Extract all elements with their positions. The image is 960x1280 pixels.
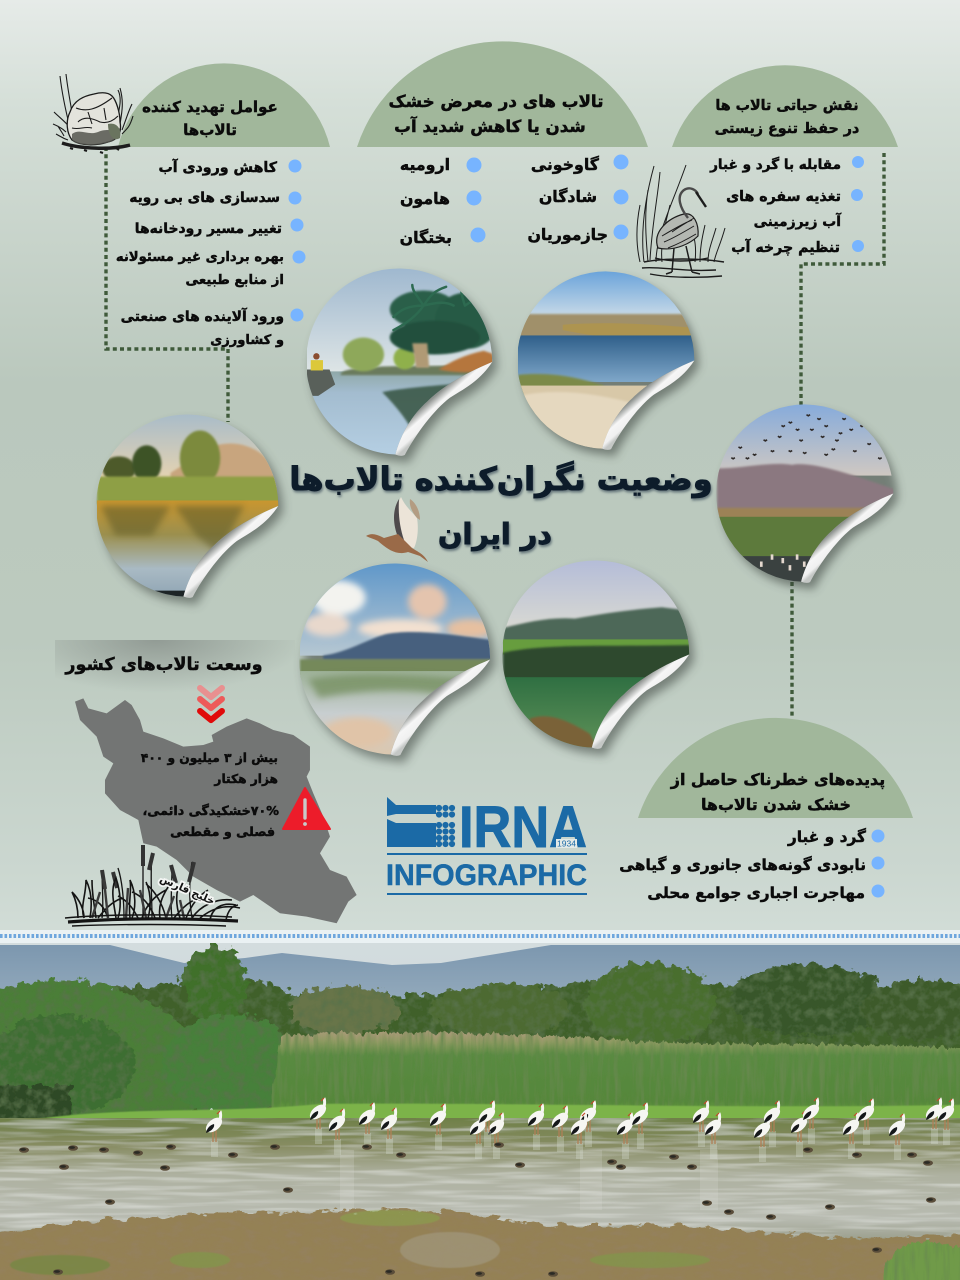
photo: wetland with storks	[0, 943, 960, 1280]
photo sticker: clouds and reflections	[300, 563, 495, 763]
list: threats: کاهش ورودی آب	[158, 158, 278, 176]
photo sticker: palms and boat	[307, 268, 499, 462]
list: vital roles: تنظیم چرخه آب	[731, 238, 840, 256]
list: wetland names: بختگان	[400, 228, 452, 247]
heading text: hazards	[670, 770, 885, 814]
logo: IRNA infographic: 1934	[557, 838, 576, 848]
text: area figure: بیش از ۳ میلیون و ۴۰۰	[141, 751, 278, 765]
list: wetland names: هامون	[400, 189, 450, 208]
list: vital roles	[709, 156, 864, 256]
map: Iran silhouette	[75, 698, 357, 923]
divider band	[0, 930, 960, 944]
map panel shading	[55, 640, 295, 725]
list: threats: بهره برداری غیر مسئولانه	[116, 250, 284, 265]
photo sticker: mountain and flock	[717, 404, 898, 589]
connector: hazards dotted line	[790, 582, 794, 718]
logo: IRNA infographic: IRNA	[459, 795, 587, 860]
heading dome: vital role	[672, 65, 898, 147]
logo: IRNA infographic	[386, 795, 587, 895]
label: Persian Gulf: خلیج فارس	[158, 873, 216, 908]
list: wetland names	[400, 154, 628, 247]
list: vital roles: مقابله با گرد و غبار	[709, 156, 841, 173]
list: vital roles: آب زیرزمینی	[754, 213, 842, 230]
panel: extent of wetlands	[64, 655, 357, 926]
connector: role dotted line	[801, 153, 884, 405]
list: threats: ورود آلاینده های صنعتی	[121, 308, 284, 325]
list: threats: سدسازی های بی رویه	[129, 190, 280, 206]
photo sticker: golden lake	[97, 414, 283, 604]
photo sticker: dry lake and reeds	[518, 271, 699, 456]
heading text: threats: تالاب‌ها	[183, 121, 237, 139]
heading dome: at risk	[357, 41, 648, 147]
title	[289, 460, 713, 551]
list: hazards	[619, 828, 884, 902]
icon: reeds sketch	[65, 845, 240, 926]
title: در ایران	[438, 517, 552, 551]
list: vital roles: تغذیه سفره های	[726, 189, 841, 205]
text: drying percentage: ۷۰%خشکیدگی دائمی،	[142, 803, 279, 818]
list: threats: از منابع طبیعی	[185, 273, 284, 288]
logo: IRNA infographic: INFOGRAPHIC	[386, 859, 587, 892]
heading text: threats	[142, 98, 278, 139]
icon: chevrons	[200, 688, 222, 720]
heading text: hazards: خشک شدن تالاب‌ها	[701, 795, 851, 814]
icon: rock with grass sketch	[53, 74, 133, 153]
list: wetland names: شادگان	[539, 187, 597, 206]
text: drying percentage: فصلی و مقطعی	[170, 824, 275, 839]
list: wetland names: جازموریان	[527, 225, 608, 244]
heading text: at risk	[389, 91, 603, 136]
list: hazards: مهاجرت اجباری جوامع محلی	[647, 884, 865, 902]
heading dome: hazards	[638, 718, 913, 818]
text: area figure	[141, 751, 278, 786]
heading text: vital role	[715, 98, 859, 137]
text: area figure: هزار هکتار	[213, 772, 278, 786]
list: wetland names: ارومیه	[400, 155, 450, 174]
panel: threats to wetlands	[53, 63, 330, 348]
heading text: vital role: در حفظ تنوع زیستی	[715, 121, 859, 137]
heading text: at risk: شدن یا کاهش شدید آب	[394, 115, 586, 136]
heading dome: threats	[118, 63, 330, 147]
connector: threats dotted line	[106, 147, 228, 422]
photo sticker: green fields	[503, 560, 694, 755]
panel: vital role of wetlands	[637, 65, 898, 277]
heading text: threats: عوامل تهدید کننده	[142, 98, 278, 116]
panel: wetlands at risk of drying	[357, 41, 648, 247]
text: drying percentage	[142, 803, 279, 839]
title: وضعیت نگران‌کننده تالاب‌ها	[289, 460, 713, 498]
list: threats	[116, 158, 306, 348]
icon: flying goose	[366, 497, 428, 562]
list: hazards: نابودی گونه‌های جانوری و گیاهی	[619, 856, 866, 874]
list: wetland names: گاوخونی	[531, 155, 600, 174]
list: hazards: گرد و غبار	[787, 828, 866, 846]
icon: heron sketch	[637, 165, 725, 277]
heading text: hazards: پدیده‌های خطرناک حاصل از	[670, 770, 885, 790]
list: threats: تغییر مسیر رودخانه‌ها	[135, 221, 282, 237]
heading text: at risk: تالاب های در معرض خشک	[389, 91, 603, 112]
panel: dangerous phenomena	[619, 718, 913, 902]
icon: warning triangle	[283, 788, 330, 829]
heading: extent: وسعت تالاب‌های کشور	[64, 655, 263, 675]
list: threats: و کشاورزی	[210, 333, 284, 348]
heading text: vital role: نقش حیاتی تالاب ها	[715, 98, 859, 114]
